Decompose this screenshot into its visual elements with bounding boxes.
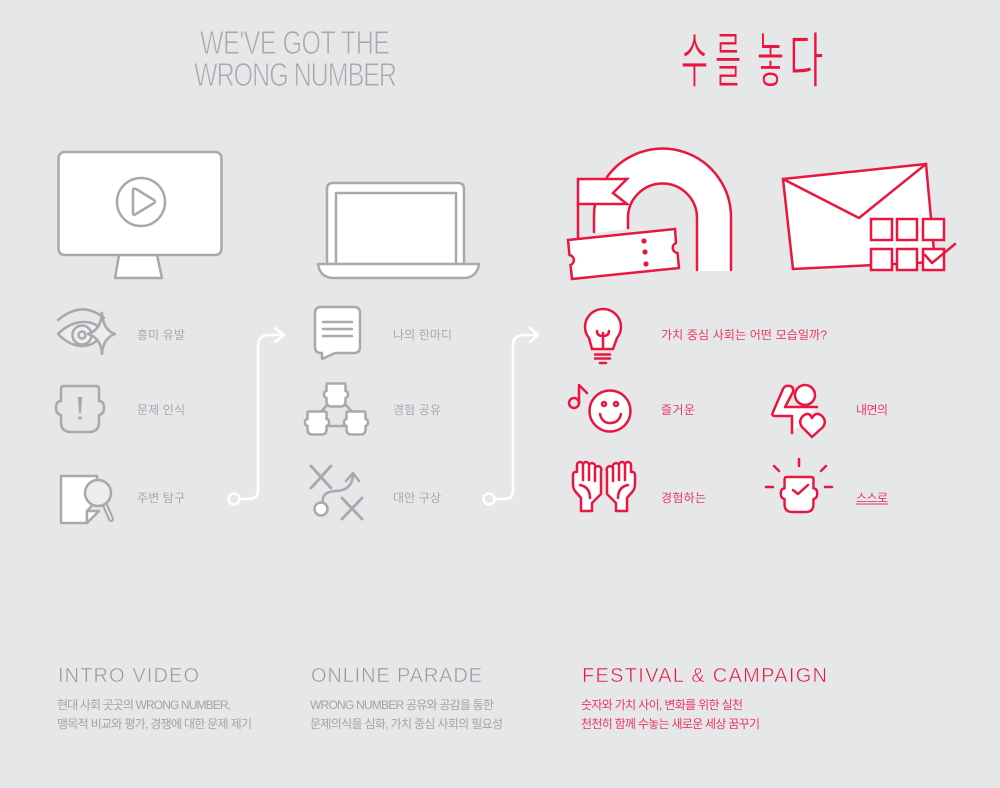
label: experiencing: 경험하는 xyxy=(661,491,706,505)
text: intro video description: 맹목적 비교와 평가, 경쟁에 대한 문제 제기 xyxy=(57,717,252,731)
flag xyxy=(578,179,627,204)
icon: document with magnifying glass xyxy=(61,476,111,523)
heading: online parade: ONLINE PARADE xyxy=(311,665,482,687)
ticket xyxy=(568,229,679,279)
title: Korean festival title: 놓 xyxy=(757,29,784,96)
label: my word: 나의 한마디 xyxy=(393,328,452,342)
icon: speech bubble xyxy=(315,307,360,359)
title: Korean festival title: 수 xyxy=(681,29,708,96)
title: We've got the wrong number: WE'VE GOT THE xyxy=(200,25,390,62)
label: share experience: 경험 공유 xyxy=(393,403,441,417)
icon: envelope with calendar grid and check xyxy=(783,164,955,270)
title: We've got the wrong number xyxy=(194,25,397,94)
text: intro video description: 현대 사회 곳곳의 WRONG NUMBER, xyxy=(57,698,231,712)
text: festival and campaign description xyxy=(581,697,760,731)
icon: light bulb xyxy=(585,309,621,363)
arrow: online to festival xyxy=(484,328,538,504)
heading: festival and campaign: FESTIVAL & CAMPAIGN xyxy=(582,665,827,687)
icon: three connected heads xyxy=(305,384,368,434)
label: plan alternatives: 대안 구상 xyxy=(393,491,441,505)
icon: head with exclamation mark xyxy=(56,386,104,432)
label: problem recognition: 문제 인식 xyxy=(137,403,185,417)
text: festival and campaign description: 숫자와 가치 사이, 변화를 위한 실천 xyxy=(581,697,743,712)
icon: tactic plan xyxy=(311,466,362,519)
text: intro video description xyxy=(57,698,252,731)
title: Korean festival title: 다 xyxy=(789,28,823,95)
label: joyful: 즐거운 xyxy=(661,403,695,417)
icon: smiling face with music note xyxy=(569,385,630,432)
title: Korean festival title xyxy=(681,27,823,96)
icon: monitor with play button xyxy=(58,152,222,278)
arrow: intro to online xyxy=(228,328,284,504)
icon: laptop xyxy=(318,183,479,278)
icon: eye with sparkle xyxy=(58,309,115,354)
label: interest: 흥미 유발 xyxy=(137,328,185,342)
text: online parade description: 문제의식을 심화, 가치 중심 사회의 필요성 xyxy=(310,717,503,731)
icon: flexing arm with heart xyxy=(772,385,825,437)
label: value-centred society question: 가치 중심 사회는 어떤 모습일까? xyxy=(661,328,827,342)
text: festival and campaign description: 천천히 함께 수놓는 새로운 세상 꿈꾸기 xyxy=(581,716,760,731)
heading: intro video: INTRO VIDEO xyxy=(58,665,199,687)
icon: head with check and rays xyxy=(766,459,832,512)
icon: two raised hands xyxy=(573,462,635,511)
title: Korean festival title: 를 xyxy=(715,27,741,95)
label: oneself: 스스로 xyxy=(856,491,888,505)
icon: magnet arch, flag and ticket xyxy=(568,149,731,279)
label: explore surroundings: 주변 탐구 xyxy=(137,491,185,505)
label: inner: 내면의 xyxy=(856,403,888,417)
text: online parade description: WRONG NUMBER 공유와 공감을 통한 xyxy=(310,698,494,712)
title: We've got the wrong number: WRONG NUMBER xyxy=(194,57,397,94)
text: online parade description xyxy=(310,698,503,731)
